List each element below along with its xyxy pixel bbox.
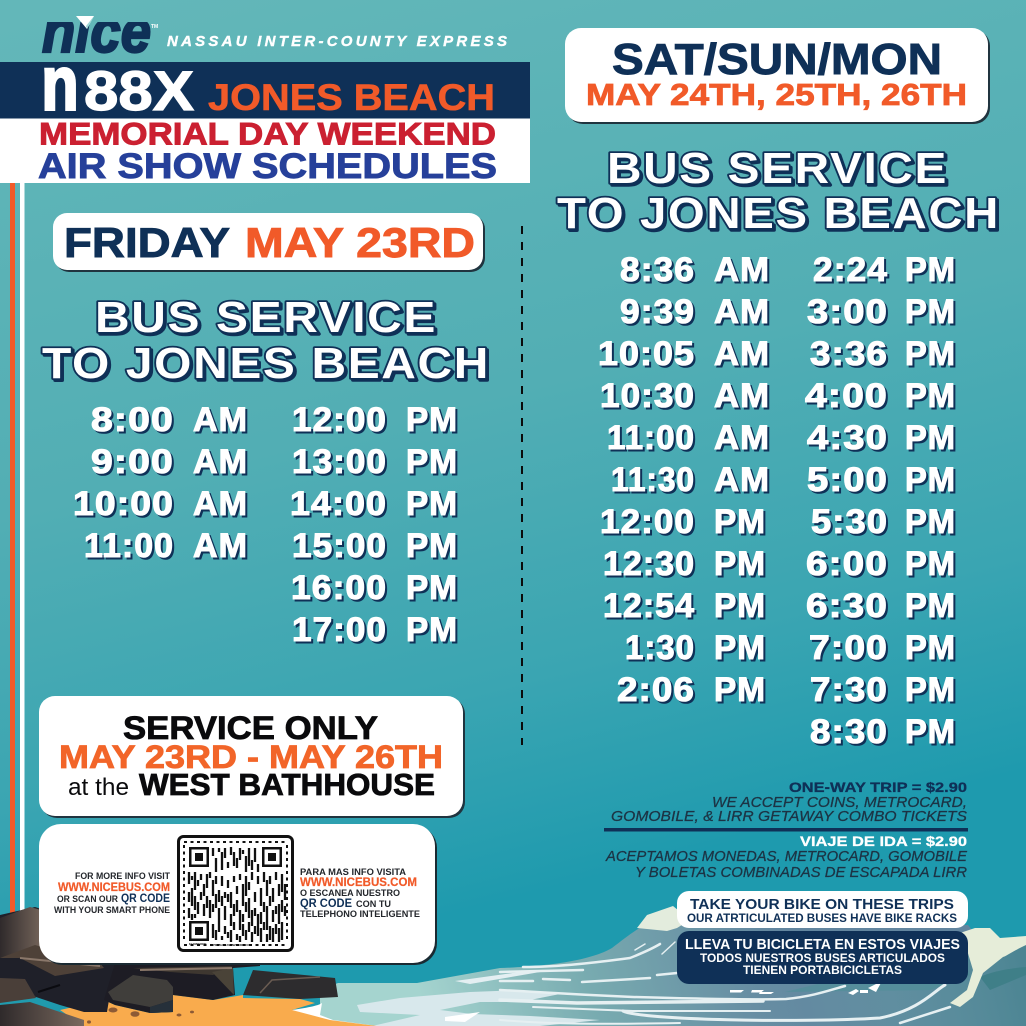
panel: service only: WEST BATHHOUSE [139,767,435,802]
english info text: OR SCAN OUR [57,894,118,905]
panel: friday date [53,213,485,272]
heading: friday bus service [42,293,490,388]
heading: friday bus service: BUS SERVICE [95,293,437,342]
weekend times: right column: PM [905,377,956,415]
weekend times: left column [598,251,770,709]
fare info: english [611,779,967,825]
friday times: left column: 8:00 [91,401,174,439]
weekend times: right column [805,251,956,751]
heading: weekend bus service: BUS SERVICE [607,144,948,193]
panel: bike spanish: LLEVA TU BICICLETA EN ESTOS VIAJES [685,936,960,953]
panel: friday date: FRIDAY [64,219,230,266]
panel: bike spanish [677,931,968,984]
weekend times: right column: PM [905,713,956,751]
weekend times: right column: PM [905,587,956,625]
weekend times: left column: PM [714,671,766,709]
logo: nice [42,16,158,54]
logo: nice: nice [42,0,151,65]
weekend times: right column: 6:30 [806,587,888,625]
weekend times: left column: 9:39 [620,293,695,331]
friday times: right column: PM [406,485,458,523]
divider: dashed line [521,226,523,745]
panel: bike english: TAKE YOUR BIKE ON THESE TRIPS [690,896,954,913]
weekend times: right column: 4:30 [807,419,888,457]
friday times: right column: 16:00 [291,569,387,607]
friday times: left column: 9:00 [91,443,174,481]
schedule title: AIR SHOW SCHEDULES [38,146,497,186]
panel: bike english: OUR ATRTICULATED BUSES HAVE BIKE RACKS [687,913,957,925]
english info text: WITH YOUR SMART PHONE [54,905,170,916]
friday times: right column: 13:00 [292,443,387,481]
spanish info text: QR CODE [300,898,352,910]
spanish info text: CON TU [356,899,391,910]
panel: bike spanish: TODOS NUESTROS BUSES ARTICULADOS [700,953,945,965]
spanish info text [300,867,420,920]
weekend times: left column: 11:00 [607,419,695,457]
fare info: english: ONE-WAY TRIP = $2.90 [789,779,967,795]
route number: 88X [84,59,194,122]
fare info: english: GOMOBILE, & LIRR GETAWAY COMBO TICKETS [611,809,967,825]
friday times: right column: PM [406,401,458,439]
weekend times: left column: AM [714,335,770,373]
weekend times: right column: PM [905,503,956,541]
illustration: sea and wave [292,906,1026,1026]
title banner [0,42,530,186]
english info text: FOR MORE INFO VISIT [75,871,170,882]
friday times: right column: PM [406,569,458,607]
heading: friday bus service: TO JONES BEACH [42,339,490,388]
spanish info text: WWW.NICEBUS.COM [300,877,417,889]
heading: weekend bus service [557,144,1000,238]
weekend times: left column: 12:00 [600,503,695,541]
weekend times: left column: PM [714,629,766,667]
panel: service only [39,696,465,818]
heading: weekend bus service: TO JONES BEACH [557,189,1000,238]
weekend times: right column: 6:00 [806,545,888,583]
friday times: right column: PM [406,527,458,565]
panel: bike spanish: TIENEN PORTABICICLETAS [743,965,902,977]
weekend times: left column: 12:54 [603,587,695,625]
panel: service only: at the [68,774,129,801]
weekend times: left column: 8:36 [620,251,695,289]
weekend times: right column: PM [905,419,956,457]
fare info: english: WE ACCEPT COINS, METROCARD, [712,795,967,811]
qr code: FLOWCODE [189,942,206,946]
weekend times: right column: 7:00 [809,629,888,667]
weekend times: right column: 2:24 [813,251,888,289]
friday times: left column: AM [193,527,248,565]
weekend times: right column: 3:00 [807,293,888,331]
weekend times: right column: 8:30 [810,713,888,751]
route number [42,42,194,126]
illustration: sand [60,995,377,1026]
friday times: left column: AM [193,485,248,523]
english info text: QR CODE [121,893,170,905]
qr code: PRIVACY.FLOWCODE.COM [213,943,252,947]
friday times: right column: 12:00 [292,401,387,439]
tagline: NASSAU INTER-COUNTY EXPRESS [167,33,507,50]
weekend times: right column: PM [905,335,956,373]
weekend times: left column: 2:06 [617,671,695,709]
weekend times: left column: AM [714,461,770,499]
fare info: spanish: Y BOLETAS COMBINADAS DE ESCAPADA LIRR [635,865,968,881]
weekend times: left column: AM [714,419,770,457]
weekend times: right column: 5:30 [811,503,888,541]
weekend times: left column: 10:05 [598,335,695,373]
friday times: right column: 15:00 [292,527,387,565]
weekend times: left column: AM [714,251,770,289]
weekend times: right column: PM [905,671,956,709]
weekend times: right column: PM [905,251,956,289]
weekend times: right column: PM [905,545,956,583]
side stripes [10,183,24,918]
friday times: left column: 10:00 [73,485,174,523]
weekend times: left column: 12:30 [603,545,695,583]
friday times: right column [290,401,458,649]
friday times: left column: 11:00 [84,527,174,565]
weekend times: right column: 7:30 [810,671,888,709]
weekend times: right column: 5:00 [807,461,888,499]
qr code [178,836,292,950]
weekend times: right column: 4:00 [805,377,888,415]
fare info: spanish [605,833,968,881]
divider: fare rule [604,828,968,832]
panel: bike english [677,891,968,928]
english info text: WWW.NICEBUS.COM [58,882,170,894]
spanish info text: TELEPHONO INTELIGENTE [300,909,420,920]
weekend times: left column: PM [714,503,766,541]
weekend times: right column: PM [905,461,956,499]
weekend times: left column: 11:30 [611,461,695,499]
route destination: JONES BEACH [208,77,495,118]
fare info: spanish: VIAJE DE IDA = $2.90 [800,833,967,849]
weekend times: right column: PM [905,629,956,667]
spanish info text: PARA MAS INFO VISITA [300,867,406,878]
weekend times: left column: 10:30 [600,377,695,415]
weekend times: left column: PM [714,587,766,625]
panel: friday date: MAY 23RD [245,219,475,266]
panel: service only: MAY 23RD - MAY 26TH [59,739,443,775]
weekend times: right column: PM [905,293,956,331]
panel: sat sun mon date [565,28,990,124]
friday times: right column: PM [406,611,458,649]
weekend times: left column: AM [714,377,770,415]
friday times: left column: AM [193,443,248,481]
weekend times: right column: 3:36 [810,335,888,373]
weekend times: left column: AM [714,293,770,331]
event name: MEMORIAL DAY WEEKEND [39,116,496,152]
weekend times: left column: PM [714,545,766,583]
spanish info text: O ESCANEA NUESTRO [300,888,400,899]
friday times: right column: 17:00 [292,611,387,649]
friday times: left column [73,401,248,565]
friday times: right column: 14:00 [290,485,387,523]
panel: sat sun mon date: SAT/SUN/MON [612,35,942,84]
friday times: right column: PM [406,443,458,481]
panel: qr info [39,824,437,965]
illustration: rocks [0,907,338,1026]
route number: n [42,42,78,126]
weekend times: left column: 1:30 [625,629,695,667]
fare info: spanish: ACEPTAMOS MONEDAS, METROCARD, GOMOBILE [605,849,967,865]
panel: service only: SERVICE ONLY [123,710,378,746]
english info text [54,871,170,916]
friday times: left column: AM [193,401,248,439]
panel: sat sun mon date: MAY 24TH, 25TH, 26TH [586,77,967,112]
logo: nice: TM [151,24,158,30]
